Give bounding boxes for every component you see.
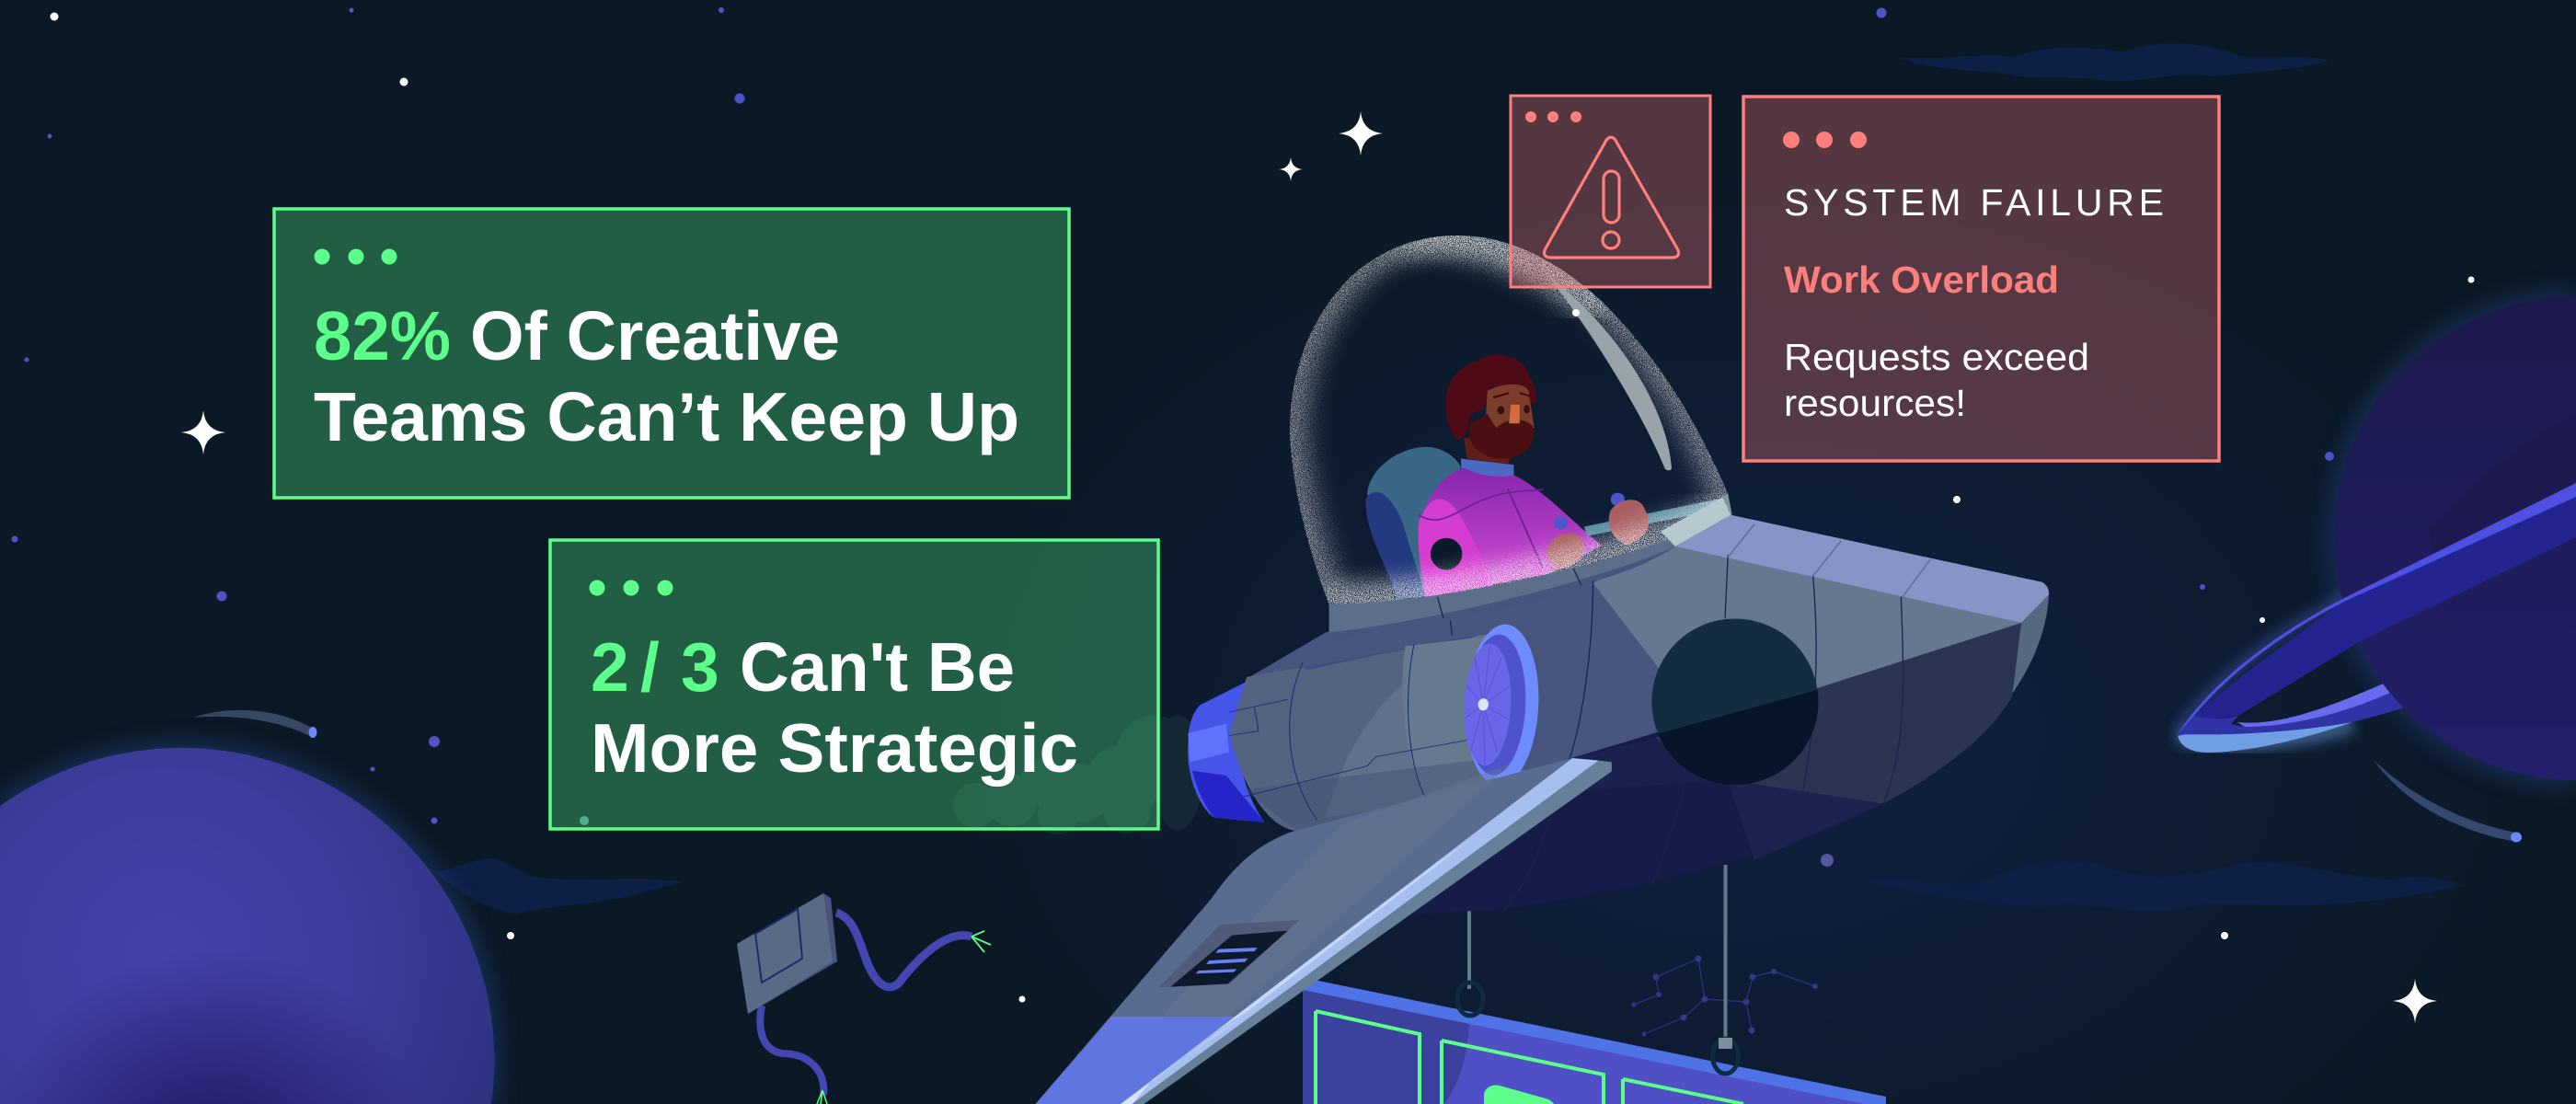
- body text: resources!: [1784, 382, 1966, 424]
- clouds: dark background clouds: [432, 43, 2464, 914]
- heading line one: 2/3: [591, 628, 719, 706]
- hull window: [1651, 618, 1818, 785]
- icon: warning triangle: [1544, 137, 1679, 258]
- wing: [1036, 758, 1612, 1104]
- pilot: [1366, 355, 1728, 597]
- smoke cloud: [953, 716, 1203, 834]
- hull: [1249, 515, 2049, 914]
- heading line one: [314, 297, 840, 374]
- title: SYSTEM FAILURE: [1784, 181, 2164, 224]
- star: sparkle top large: [1339, 111, 1383, 155]
- window dots: [589, 580, 673, 596]
- comet: right: [2374, 760, 2522, 843]
- panel: 2/3 stat: [550, 540, 1158, 829]
- panel: warning window: [1511, 96, 1710, 287]
- star: sparkle top small: [1279, 157, 1303, 181]
- subtitle: Work Overload: [1784, 259, 2059, 301]
- comet: left: [193, 710, 316, 738]
- heading line one: 82%: [314, 297, 451, 374]
- heading line one: [591, 628, 1015, 706]
- planet: left: [0, 742, 500, 1104]
- star: dot over dome: [1572, 309, 1580, 316]
- body text: Requests exceed: [1784, 336, 2089, 378]
- spaceship: [1036, 236, 2049, 1104]
- broken switch with cables: [737, 893, 991, 1104]
- panel: system failure: [1743, 97, 2219, 461]
- window dots: [1783, 132, 1867, 148]
- cockpit dome: [1290, 236, 1732, 604]
- star: sparkle right: [2393, 979, 2437, 1023]
- engine: [1188, 623, 1542, 831]
- hanging cables and rings: [1457, 865, 1739, 1074]
- heading line one: Of Creative: [470, 297, 840, 374]
- hanging screen at bottom: [1303, 980, 1886, 1104]
- window dots: [315, 248, 397, 265]
- heading line two: Teams Can’t Keep Up: [314, 378, 1019, 455]
- heading line one: Can't Be: [740, 628, 1015, 706]
- constellation: [1632, 956, 1818, 1036]
- heading line two: More Strategic: [591, 709, 1078, 787]
- window dots: [1525, 111, 1581, 122]
- planet: right with ring: [2178, 290, 2576, 787]
- panel: 82% stat: [274, 209, 1069, 498]
- star: sparkle left: [181, 410, 225, 454]
- body text: [1784, 336, 2089, 424]
